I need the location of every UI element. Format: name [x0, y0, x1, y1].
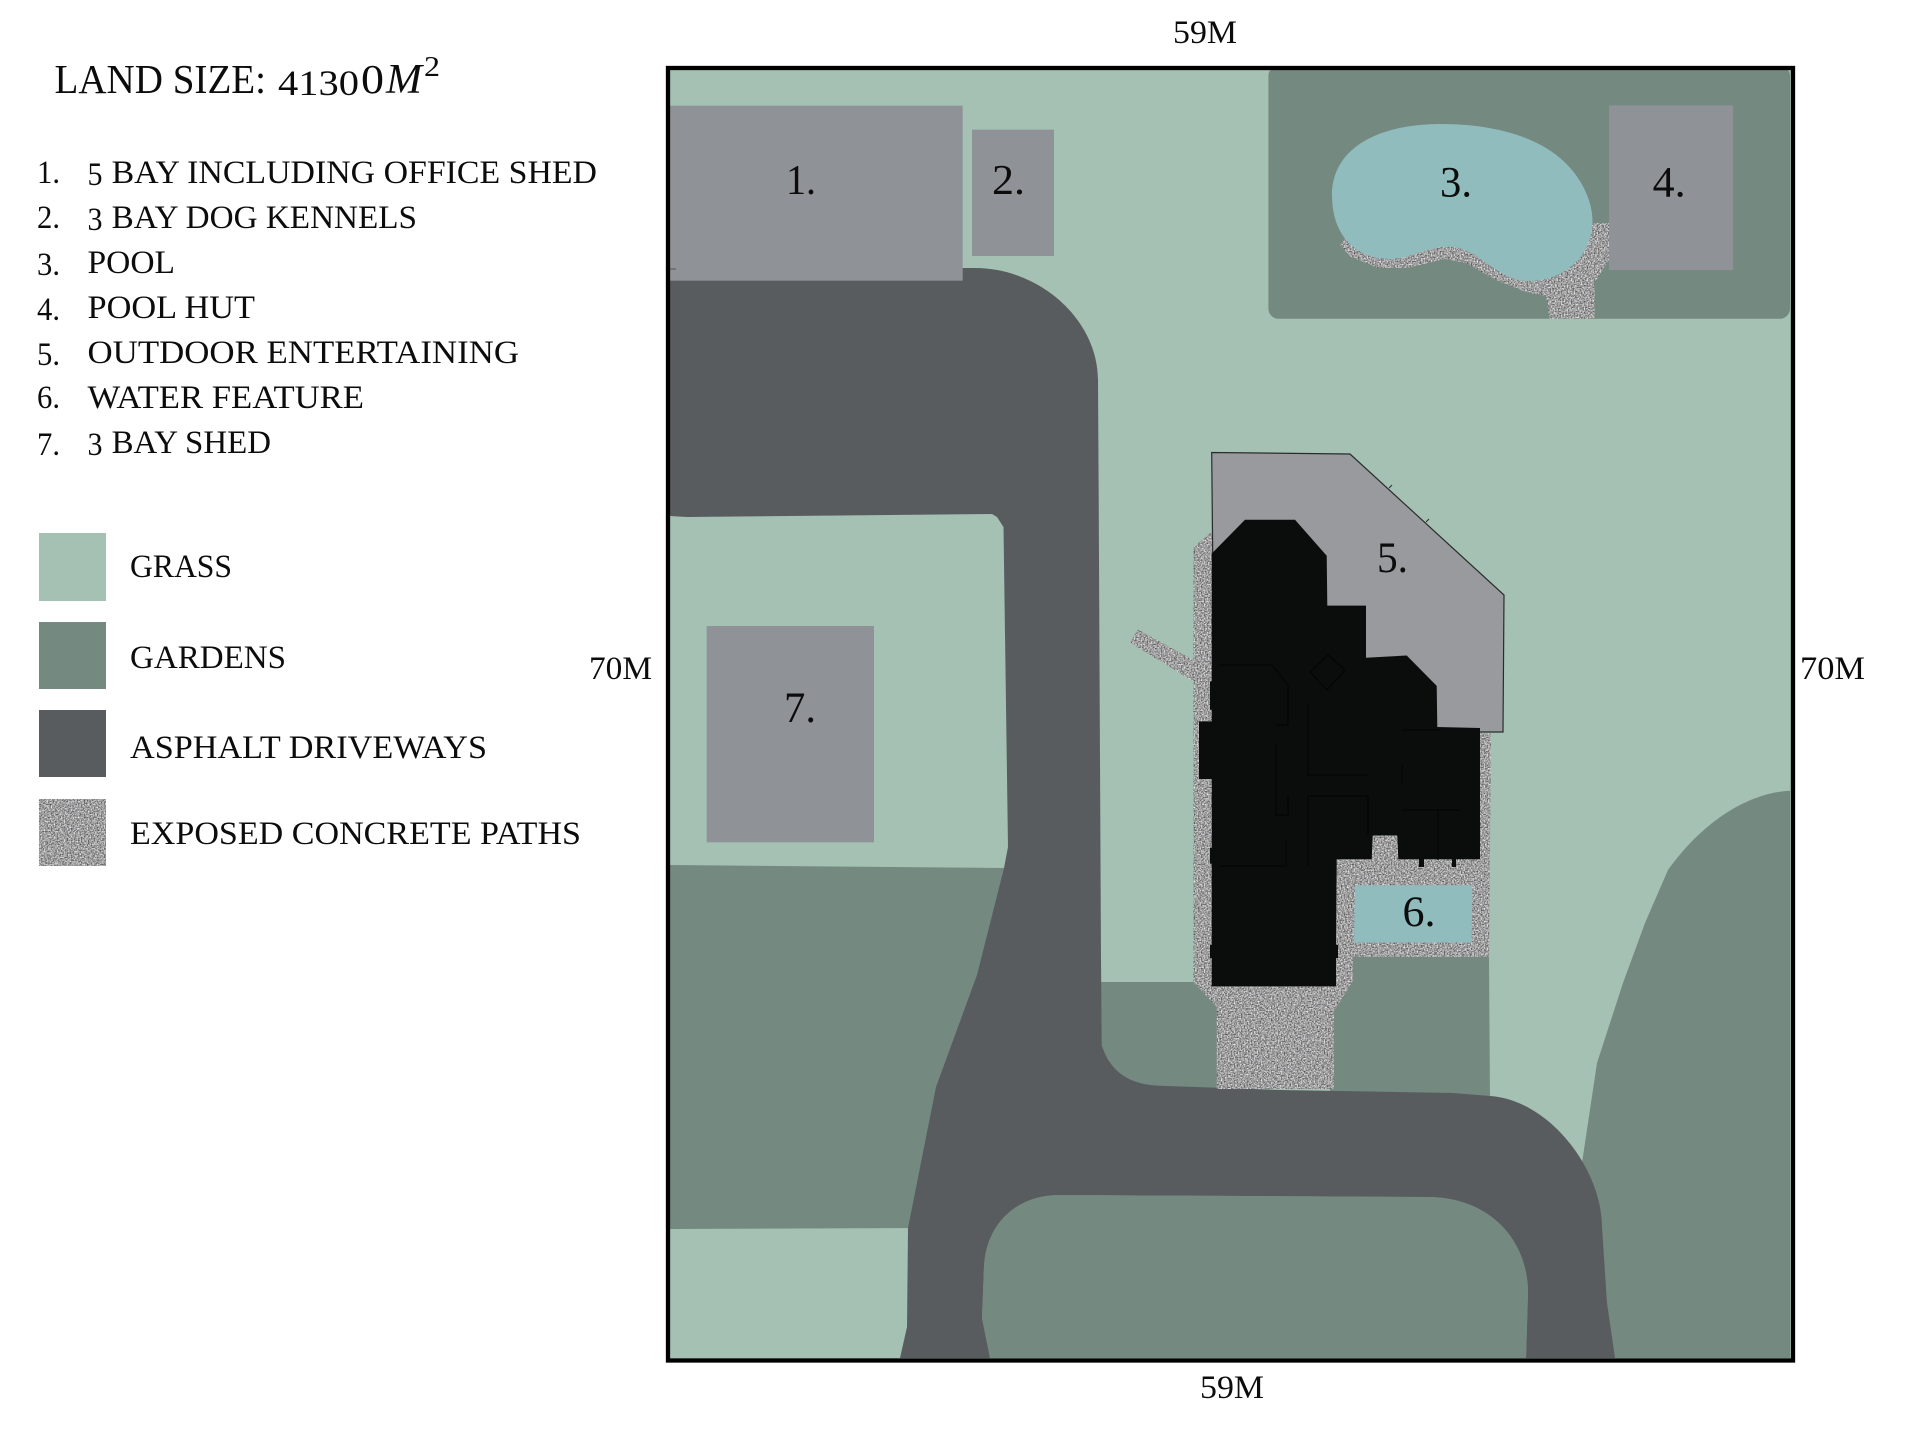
building 1: office shed: 1.	[786, 158, 816, 204]
list item 3: POOL	[88, 245, 175, 281]
asphalt driveway	[670, 268, 1615, 1358]
legend	[39, 533, 581, 866]
list item 6: 6.	[37, 380, 60, 416]
dimension: bottom 59M: 59M	[1200, 1370, 1264, 1406]
list item 7	[37, 425, 271, 463]
garden: lower left	[670, 865, 1010, 1229]
list item 6: WATER FEATURE	[88, 380, 364, 416]
title: land size: LAND SIZE:	[54, 56, 266, 102]
title: land size: M	[385, 57, 424, 103]
building 2: dog kennels	[972, 130, 1054, 256]
title: land size: 4130	[278, 63, 359, 103]
title: land size: 0	[361, 56, 384, 102]
garden: inside driveway loop	[982, 1195, 1528, 1358]
list item 2: 2.	[37, 200, 60, 236]
legend: asphalt driveways	[39, 710, 487, 777]
dimension: right 70M: 70M	[1800, 651, 1865, 687]
title: land size: 2	[424, 51, 440, 83]
house footprint	[1199, 520, 1480, 986]
grass base	[668, 68, 1793, 1360]
garden: right side	[1582, 791, 1790, 1358]
legend: gardens	[39, 622, 286, 689]
building 4: pool hut	[1609, 105, 1733, 270]
legend: asphalt driveways: ASPHALT DRIVEWAYS	[130, 730, 487, 766]
building 4: pool hut: 4.	[1653, 160, 1686, 206]
list item 2: 3	[88, 202, 102, 238]
numbered list of site features	[37, 155, 597, 463]
title: land size	[54, 51, 440, 103]
garden: right of front path	[1330, 957, 1490, 1100]
outdoor entertaining area 5: 5.	[1377, 535, 1408, 582]
list item 7: 7.	[37, 427, 60, 463]
list item 1: 1.	[37, 155, 60, 191]
pool	[1332, 124, 1593, 281]
list item 1: 5	[88, 157, 102, 193]
building 7: 3 bay shed	[707, 626, 874, 842]
site plan map	[668, 66, 1793, 1360]
water feature 6: 6.	[1402, 889, 1436, 936]
dimension: top 59M: 59M	[1173, 15, 1237, 51]
outdoor entertaining area 5	[1212, 452, 1504, 732]
dimension: left 70M: 70M	[589, 651, 652, 687]
list item 7: BAY SHED	[112, 425, 271, 461]
list item 7: 3	[88, 427, 102, 463]
legend: gardens: GARDENS	[130, 640, 286, 676]
building 2: dog kennels: 2.	[992, 158, 1025, 204]
garden: top right pool garden	[1268, 66, 1790, 319]
list item 5: 5.	[37, 337, 60, 373]
list item 3	[37, 245, 175, 283]
legend: exposed concrete paths	[39, 799, 581, 866]
water feature 6	[1354, 885, 1472, 943]
legend: grass: GRASS	[130, 549, 232, 585]
pool: 3.	[1440, 160, 1472, 206]
property boundary frame	[668, 68, 1793, 1360]
list item 5: OUTDOOR ENTERTAINING	[88, 335, 519, 371]
list item 1: BAY INCLUDING OFFICE SHED	[112, 155, 597, 191]
list item 2: BAY DOG KENNELS	[112, 200, 417, 236]
legend: grass	[39, 533, 232, 601]
list item 4: 4.	[37, 292, 60, 328]
concrete paths around house	[1130, 532, 1491, 1089]
list item 4: POOL HUT	[88, 290, 255, 326]
building 1: office shed	[670, 106, 963, 281]
building 7: 3 bay shed: 7.	[784, 685, 816, 732]
list item 3: 3.	[37, 247, 60, 283]
legend: exposed concrete paths: EXPOSED CONCRETE PATHS	[130, 816, 581, 852]
garden: left of front path	[1100, 982, 1220, 1096]
list item 4	[37, 290, 255, 328]
pool concrete path	[1340, 223, 1609, 319]
